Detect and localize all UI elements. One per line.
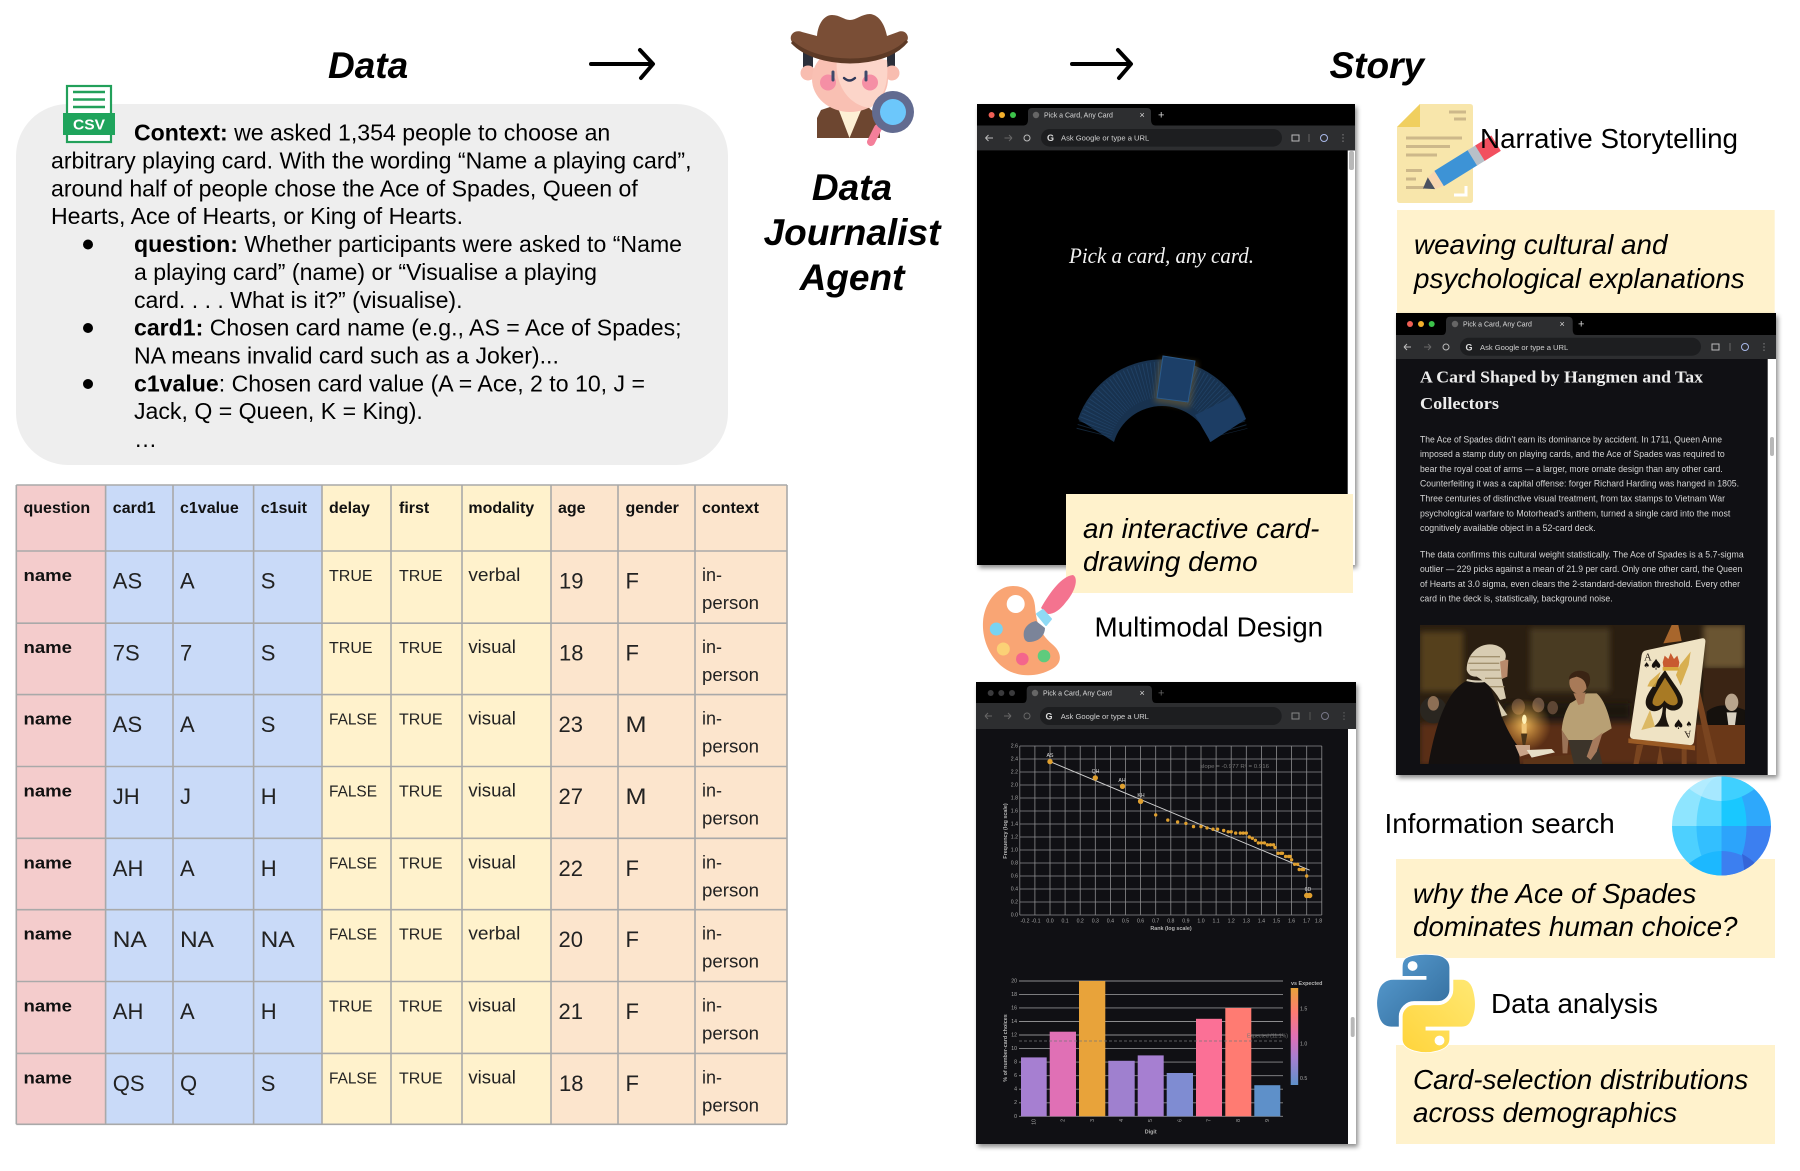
table row 8: S — [261, 1071, 275, 1096]
table row 6: NA — [261, 927, 295, 952]
article paragraph 2: card in the deck is, statistically, background noise. — [1420, 594, 1613, 604]
article title: A Card Shaped by Hangmen and Tax — [1420, 368, 1704, 387]
table row 3: person — [702, 737, 759, 757]
table row 3: 23 — [558, 712, 583, 737]
chart: rank-frequency scatter: 0.0 — [1046, 918, 1054, 924]
chart: rank-frequency scatter: 1.5 — [1273, 918, 1280, 924]
caption: why Ace of Spades: why the Ace of Spades — [1413, 878, 1696, 909]
table row 2: visual — [468, 637, 516, 657]
demo title: Pick a card, any card. — [1068, 243, 1254, 268]
chart: rank-frequency scatter: -0.1 — [1032, 918, 1041, 924]
caption: why Ace of Spades: dominates human choice? — [1413, 911, 1738, 942]
icon: paint palette — [983, 575, 1076, 675]
label: Information search: Information search — [1384, 808, 1615, 839]
table row 4: name — [24, 782, 72, 800]
article paragraph 1: imposed a stamp duty on playing cards, and the Ace of Spades was required to — [1420, 449, 1725, 459]
chart: rank-frequency scatter: 1.7 — [1303, 918, 1310, 924]
table header row: c1suit — [261, 500, 308, 517]
table row 1: TRUE — [399, 568, 443, 585]
chart: digit bar chart: Digit — [1145, 1130, 1157, 1136]
bullet: card1: card1: Chosen card name (e.g., AS = Ace of Spades; — [134, 315, 682, 341]
table header row: age — [558, 500, 586, 517]
table row 8: QS — [113, 1071, 145, 1096]
bullet: c1value: c1value: Chosen card value (A = Ace, 2 to 10, J = — [134, 370, 645, 396]
chart: rank-frequency scatter: 1.6 — [1011, 808, 1018, 814]
table row 2: name — [24, 638, 72, 657]
table row 3: M — [626, 712, 646, 737]
table row 3: in- — [702, 709, 722, 729]
article paragraph 1: psychological warfare to Motorhead’s anthem, turned a single card into the most — [1420, 508, 1731, 518]
chart legend — [1291, 981, 1322, 1085]
article paragraph 2: The data confirms this cultural weight statistically. The Ace of Spades is a 5.7-sigma — [1420, 549, 1744, 559]
table row 5: person — [702, 880, 759, 900]
table row 7: 21 — [558, 999, 583, 1024]
table row 5: A — [180, 856, 195, 881]
bullet: card1: NA means invalid card such as a Joker)... — [134, 342, 559, 368]
chart: rank-frequency scatter: 1.4 — [1258, 918, 1265, 924]
table row 1: verbal — [468, 565, 520, 585]
table row 3: A — [180, 712, 195, 737]
table row 1: in- — [702, 565, 722, 585]
chart: rank-frequency scatter: Frequency (log scale) — [1003, 803, 1009, 859]
chart: rank-frequency scatter: 0.1 — [1061, 918, 1069, 924]
giant ace of spades card: ♠ — [1643, 661, 1650, 670]
chart: rank-frequency scatter: 0.4 — [1107, 918, 1114, 924]
table row 7: A — [180, 999, 195, 1024]
table row 4: J — [180, 784, 191, 809]
chart: rank-frequency scatter: 0.8 — [1011, 860, 1018, 866]
chart: digit bar chart: 18 — [1011, 992, 1017, 998]
judge — [1428, 644, 1530, 765]
article paragraph 1 — [1420, 434, 1739, 533]
giant ace of spades card — [1628, 625, 1717, 765]
chart: digit bar chart: Expected (11.1%) — [1247, 1034, 1288, 1040]
chart: rank-frequency scatter: 2.6 — [1011, 744, 1018, 750]
table row 3 — [24, 709, 759, 757]
table row 1 — [24, 565, 759, 613]
browser window: story article — [1396, 313, 1776, 775]
chart: rank-frequency scatter: 0.5 — [1122, 918, 1129, 924]
chart legend: 0.5 — [1300, 1076, 1307, 1082]
table row 7: visual — [468, 996, 516, 1016]
table row 5: AH — [113, 856, 143, 881]
chart: digit bar chart: 20 — [1011, 978, 1017, 984]
giant ace of spades card: ♠ — [1673, 718, 1685, 733]
table row 4: H — [261, 784, 277, 809]
giant ace of spades card: A — [1683, 728, 1692, 740]
text: context paragraph: Hearts, Ace of Hearts, or King of Hearts. — [51, 203, 463, 229]
table row 2: TRUE — [399, 640, 443, 657]
chart legend: 1.0 — [1300, 1042, 1307, 1048]
table row 5: H — [261, 856, 277, 881]
chart: digit bar chart: 3 — [1090, 1119, 1096, 1122]
article title: Collectors — [1420, 394, 1499, 413]
caption: weaving explanations — [1397, 210, 1775, 313]
chart: rank-frequency scatter: 0.6 — [1011, 874, 1018, 880]
table row 6: person — [702, 952, 759, 972]
article paragraph 1: bear the royal coat of arms — a larger, more ornate design than any other card. — [1420, 464, 1723, 474]
table row 5: TRUE — [399, 855, 443, 872]
chart: rank-frequency scatter: 0.0 — [1011, 912, 1018, 918]
icon: detective agent — [791, 14, 914, 142]
caption: card-selection distributions: Card-selection distributions — [1413, 1064, 1748, 1095]
table row 6: 20 — [558, 927, 583, 952]
table row 6: verbal — [468, 924, 520, 944]
icon: globe — [1672, 776, 1771, 876]
article paragraph 1: Three centuries of distinctive visual treatment, from tax stamps to Vietnam War — [1420, 494, 1725, 504]
giant ace of spades card: ♠ — [1649, 657, 1662, 674]
chart: rank-frequency scatter: 0.4 — [1011, 886, 1018, 892]
table row 2 — [24, 637, 759, 685]
table row 1: name — [24, 566, 72, 585]
table header row: context — [702, 500, 760, 517]
heading: Data Journalist Agent: Data — [812, 167, 892, 208]
chart: rank-frequency scatter: QH — [1092, 769, 1100, 775]
table row 4: in- — [702, 780, 722, 800]
table row 8: 18 — [559, 1071, 583, 1096]
browser window: charts: Ask Google or type a URL — [1061, 712, 1149, 721]
heading: Story: Story — [1330, 45, 1426, 86]
table row 7: H — [261, 999, 277, 1024]
caption: interactive demo — [1066, 494, 1353, 593]
browser window: story article: + — [1578, 318, 1584, 330]
chart: digit bar chart: 5 — [1148, 1119, 1154, 1122]
bullet: c1value: … — [134, 426, 157, 452]
giant ace of spades card: ♠ — [1686, 719, 1692, 728]
table row 6: FALSE — [329, 927, 377, 944]
table row 6: TRUE — [399, 927, 443, 944]
table row 8: Q — [180, 1071, 197, 1096]
chart: rank-frequency scatter: 0.6 — [1137, 918, 1144, 924]
caption: interactive demo: an interactive card- — [1083, 513, 1319, 544]
table row 3: AS — [113, 712, 142, 737]
browser window: charts: + — [1158, 688, 1164, 700]
table row 3: TRUE — [399, 712, 443, 729]
chart: rank-frequency scatter: Rank (log scale) — [1150, 926, 1192, 932]
bullet: c1value — [83, 370, 645, 452]
chart: rank-frequency scatter: 1.8 — [1315, 918, 1322, 924]
chart: digit bar chart: 0 — [1014, 1114, 1017, 1120]
chart: digit bar chart: 6 — [1014, 1073, 1017, 1079]
table row 8: F — [626, 1071, 639, 1096]
table row 8: FALSE — [329, 1070, 377, 1087]
icon: document with pencil — [1397, 104, 1501, 203]
browser window: charts — [976, 682, 1356, 1144]
chart: rank-frequency scatter: AH — [1118, 778, 1126, 784]
text: context paragraph — [51, 120, 691, 229]
bullet: question: card. . . . What is it?” (visualise). — [134, 287, 463, 313]
text: context paragraph: arbitrary playing card. With the wording “Name a playing card”, — [51, 148, 691, 174]
table row 6: in- — [702, 924, 722, 944]
chart: rank-frequency scatter: 1.4 — [1011, 822, 1018, 828]
table header row: card1 — [113, 500, 156, 517]
chart: digit bar chart: 4 — [1119, 1119, 1125, 1122]
chart: rank-frequency scatter: 0.8 — [1167, 918, 1175, 924]
table row 2: TRUE — [329, 640, 373, 657]
article title — [1420, 368, 1704, 413]
chart: rank-frequency scatter: 1.2 — [1011, 834, 1018, 840]
chart: rank-frequency scatter: 1.3 — [1243, 918, 1250, 924]
chart: digit bar chart: 10 — [1011, 1046, 1017, 1052]
table row 2: person — [702, 665, 759, 685]
browser window: charts: G — [1046, 711, 1053, 721]
chart: rank-frequency scatter: 2.0 — [1011, 782, 1018, 788]
table row 2: 7S — [113, 641, 140, 666]
chart: rank-frequency scatter: -0.2 — [1021, 918, 1030, 924]
table row 1: AS — [113, 568, 142, 594]
browser window: card demo: Ask Google or type a URL — [1061, 134, 1149, 143]
chart: rank-frequency scatter: 1.6 — [1288, 918, 1295, 924]
table row 1: F — [626, 568, 639, 594]
table row 4: M — [626, 784, 646, 809]
table row 1: A — [180, 568, 195, 594]
table header row — [24, 500, 760, 517]
table row 5: FALSE — [329, 855, 377, 872]
bullet: question: a playing card” (name) or “Visualise a playing — [134, 259, 597, 285]
table row 4: person — [702, 808, 759, 828]
table row 7: AH — [113, 999, 143, 1024]
chart: rank-frequency scatter: slope = -0.977 R² = 0.916 — [1200, 764, 1269, 770]
chart: digit bar chart: 8 — [1014, 1060, 1017, 1066]
table row 1: 19 — [559, 568, 583, 594]
table row 6: F — [626, 927, 639, 952]
chart: rank-frequency scatter: 0.3 — [1092, 918, 1099, 924]
table header row: c1value — [180, 500, 239, 517]
table row 8: TRUE — [399, 1070, 443, 1087]
table row 7: F — [626, 999, 639, 1024]
caption: interactive demo: drawing demo — [1083, 546, 1258, 577]
browser window: charts: Pick a Card, Any Card — [1043, 690, 1112, 698]
table row 3: name — [24, 710, 72, 729]
bullet: card1 — [83, 315, 682, 368]
chart: rank-frequency scatter: 2.2 — [1011, 770, 1018, 776]
table row 2: F — [626, 641, 639, 666]
caption: why Ace of Spades — [1396, 859, 1775, 958]
chart: digit bar chart: 8 — [1236, 1119, 1242, 1122]
caption: weaving explanations: psychological explanations — [1413, 263, 1745, 294]
illustration: courtroom with ace of spades — [1420, 625, 1745, 765]
chart: digit bar chart: 2 — [1014, 1100, 1017, 1106]
heading: Data Journalist Agent: Journalist — [764, 212, 942, 253]
article paragraph 1: cognitively available object in a 52-card deck. — [1420, 523, 1596, 533]
chart: digit bar chart: 7 — [1206, 1119, 1212, 1122]
browser window: card demo: G — [1047, 133, 1054, 143]
chart: rank-frequency scatter: 0.7 — [1152, 918, 1159, 924]
accused man — [1562, 671, 1612, 765]
caption: card-selection distributions — [1396, 1045, 1775, 1144]
chart: digit bar chart: 14 — [1011, 1019, 1017, 1025]
chart: rank-frequency scatter: 1.2 — [1228, 918, 1235, 924]
table row 6 — [24, 924, 759, 972]
browser window: card demo: × — [1140, 110, 1145, 120]
heading: Data Journalist Agent — [764, 167, 942, 298]
browser window: card demo: Pick a Card, Any Card — [1044, 112, 1113, 120]
bullet: question — [83, 231, 682, 313]
giant ace of spades card: A — [1644, 652, 1652, 663]
chart legend: 1.5 — [1300, 1006, 1307, 1012]
article paragraph 2: of Hearts at 3.0 sigma, even clears the 2-standard-deviation threshold. Every other — [1420, 579, 1740, 589]
chart: digit bar chart: 10 — [1032, 1119, 1038, 1125]
browser window: story article: × — [1560, 319, 1565, 329]
table row 3: FALSE — [329, 712, 377, 729]
chart: rank-frequency scatter: KH — [1137, 793, 1145, 799]
table header row: first — [399, 500, 430, 517]
table row 8: name — [24, 1068, 72, 1087]
icon: python logo — [1377, 954, 1476, 1053]
article paragraph 2 — [1420, 549, 1744, 604]
table row 8 — [24, 1067, 759, 1115]
card fan — [1078, 356, 1246, 442]
table row 8: person — [702, 1095, 759, 1115]
chart: digit bar chart: 2 — [1060, 1119, 1066, 1122]
table header row: gender — [626, 500, 679, 517]
browser window: story article: G — [1466, 342, 1473, 352]
chart: digit bar chart: 12 — [1011, 1032, 1017, 1038]
chart: digit bar chart: 4 — [1014, 1086, 1017, 1092]
table row 2: 7 — [180, 641, 192, 666]
table row 2: 18 — [559, 641, 583, 666]
bullet: c1value: Jack, Q = Queen, K = King). — [134, 398, 423, 424]
chart: rank-frequency scatter: 1.8 — [1011, 796, 1018, 802]
text: context paragraph: Context: we asked 1,354 people to choose an — [134, 120, 610, 146]
arrow: agent to story — [1072, 50, 1131, 78]
table row 2: S — [261, 641, 275, 666]
table row 8: in- — [702, 1067, 722, 1087]
heading: Data: Data — [328, 45, 408, 86]
chart: rank-frequency scatter: 6D — [1305, 887, 1312, 893]
chart: rank-frequency scatter: 1.0 — [1197, 918, 1205, 924]
table row 7 — [24, 996, 759, 1044]
article paragraph 1: Counterfeiting it was a capital offense: forger Richard Harding was hanged in 1805. — [1420, 479, 1739, 489]
text: context paragraph: around half of people chose the Ace of Spades, Queen of — [51, 175, 638, 201]
browser window: story article: Ask Google or type a URL — [1480, 343, 1568, 352]
table row 6: name — [24, 925, 72, 944]
table row 4: 27 — [558, 784, 583, 809]
chart: digit bar chart — [1003, 978, 1322, 1136]
table and papers — [1524, 749, 1574, 764]
table row 4: visual — [468, 780, 516, 800]
article paragraph 1: The Ace of Spades didn’t earn its dominance by accident. In 1711, Queen Anne — [1420, 434, 1722, 444]
article paragraph 2: outlier — 229 picks against a mean of 21.9 per card. Only one other card, the Queen — [1420, 564, 1742, 574]
table row 3: S — [261, 712, 275, 737]
table row 7: in- — [702, 996, 722, 1016]
table row 7: person — [702, 1024, 759, 1044]
table row 4: JH — [113, 784, 140, 809]
chart: rank-frequency scatter: 0.9 — [1182, 918, 1190, 924]
chart: digit bar chart: 16 — [1011, 1006, 1017, 1012]
browser window: card demo — [977, 104, 1355, 565]
chart: rank-frequency scatter: 2.4 — [1011, 756, 1018, 762]
heading: Data Journalist Agent: Agent — [799, 257, 906, 298]
table header row: question — [24, 500, 90, 517]
table row 5: name — [24, 853, 72, 872]
caption: card-selection distributions: across demographics — [1413, 1097, 1677, 1128]
chart: digit bar chart: 9 — [1265, 1119, 1271, 1122]
table row 4 — [24, 780, 759, 828]
panel: dataset context — [16, 104, 728, 465]
bullet: question: question: Whether participants were asked to “Name — [134, 231, 682, 257]
table row 3: visual — [468, 709, 516, 729]
table row 5: F — [626, 856, 639, 881]
table row 6: NA — [180, 927, 214, 952]
chart: rank-frequency scatter — [1003, 744, 1322, 932]
arrow: data to agent — [591, 50, 653, 78]
label: Narrative Storytelling: Narrative Storytelling — [1480, 123, 1738, 154]
table row 1: person — [702, 593, 759, 613]
table row 4: TRUE — [399, 784, 443, 800]
table row 2: in- — [702, 637, 722, 657]
label: Data analysis: Data analysis — [1491, 988, 1658, 1019]
browser window: card demo: + — [1158, 110, 1164, 122]
caption: weaving explanations: weaving cultural and — [1414, 229, 1669, 260]
table row 7: TRUE — [329, 998, 373, 1016]
table row 7: name — [24, 996, 72, 1016]
chart: rank-frequency scatter: 0.2 — [1077, 918, 1084, 924]
table row 5: in- — [702, 852, 722, 872]
candle — [1502, 700, 1550, 749]
table header row: delay — [329, 500, 370, 517]
table row 5 — [24, 852, 759, 900]
chart: digit bar chart: % of number-card choices — [1003, 1014, 1009, 1082]
table row 5: 22 — [558, 856, 583, 881]
chart: digit bar chart: 6 — [1178, 1119, 1184, 1122]
browser window: story article: Pick a Card, Any Card — [1463, 322, 1532, 328]
table row 8: visual — [468, 1067, 516, 1087]
icon: CSV file: CSV — [73, 116, 105, 134]
table row 1: S — [261, 568, 275, 594]
chart legend: vs Expected — [1291, 981, 1322, 987]
table: dataset preview — [16, 485, 787, 1124]
chart: rank-frequency scatter: 0.2 — [1011, 900, 1018, 906]
icon: CSV file — [63, 86, 115, 142]
browser window: charts: × — [1140, 688, 1145, 698]
table row 4: FALSE — [329, 784, 377, 800]
label: Multimodal Design: Multimodal Design — [1094, 612, 1323, 642]
table header row: modality — [468, 500, 534, 517]
chart: rank-frequency scatter: 1.1 — [1212, 918, 1220, 924]
chart: rank-frequency scatter: AS — [1047, 753, 1054, 759]
table row 5: visual — [468, 852, 516, 872]
chart: rank-frequency scatter: 1.0 — [1011, 848, 1018, 854]
table row 7: TRUE — [399, 998, 443, 1016]
table row 1: TRUE — [329, 568, 373, 585]
table row 6: NA — [113, 927, 147, 952]
